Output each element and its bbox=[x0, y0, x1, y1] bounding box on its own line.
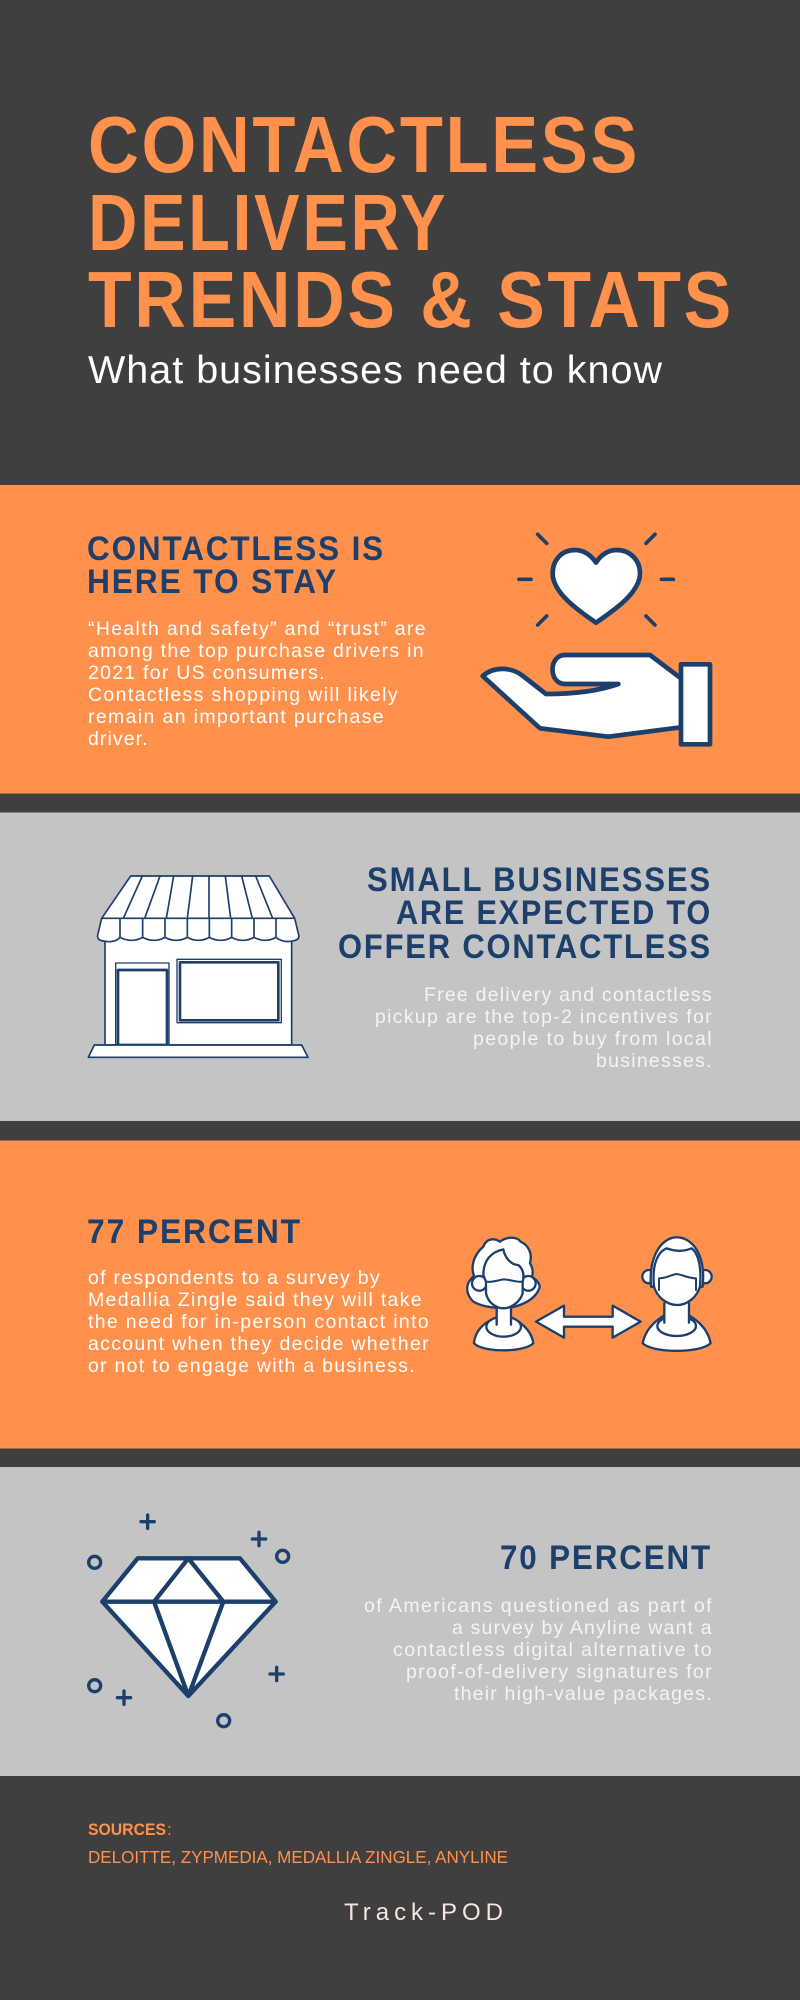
body text: of respondents to a survey by bbox=[88, 1267, 380, 1289]
body text: their high-value packages. bbox=[454, 1683, 712, 1705]
panel: 70 percent bbox=[0, 1467, 800, 1776]
subtitle: What businesses need to know bbox=[88, 349, 663, 392]
body text: people to buy from local bbox=[473, 1028, 712, 1050]
panel: contactless is here to stay bbox=[0, 485, 800, 794]
body text: among the top purchase drivers in bbox=[88, 640, 424, 662]
body text bbox=[364, 1595, 712, 1705]
heading bbox=[338, 861, 712, 966]
sources: SOURCES bbox=[88, 1820, 166, 1839]
body text: remain an important purchase bbox=[88, 706, 384, 728]
body text bbox=[88, 618, 426, 750]
body text: the need for in-person contact into bbox=[88, 1311, 429, 1333]
body text: Free delivery and contactless bbox=[424, 984, 712, 1006]
body text: businesses. bbox=[596, 1050, 712, 1072]
body text: 2021 for US consumers. bbox=[88, 662, 325, 684]
title bbox=[88, 100, 734, 344]
body text: driver. bbox=[88, 728, 148, 750]
heading: OFFER CONTACTLESS bbox=[338, 928, 712, 966]
body text: “Health and safety” and “trust” are bbox=[88, 618, 426, 640]
body text: a survey by Anyline want a bbox=[452, 1617, 712, 1639]
body text: contactless digital alternative to bbox=[393, 1639, 712, 1661]
brand name: Track-POD bbox=[344, 1899, 503, 1926]
icon: diamond with sparkles bbox=[89, 1515, 289, 1727]
body text: of Americans questioned as part of bbox=[364, 1595, 712, 1617]
body text: or not to engage with a business. bbox=[88, 1355, 415, 1377]
title: CONTACTLESS bbox=[88, 100, 640, 189]
panel: 77 percent bbox=[0, 1140, 800, 1448]
panel: small businesses bbox=[0, 812, 800, 1121]
body text: Contactless shopping will likely bbox=[88, 684, 398, 706]
title: DELIVERY bbox=[88, 178, 448, 267]
body text: proof-of-delivery signatures for bbox=[406, 1661, 712, 1683]
title: TRENDS & STATS bbox=[88, 255, 734, 344]
icon: two masked people with arrow bbox=[467, 1237, 712, 1351]
sources: : bbox=[167, 1820, 172, 1839]
heading: CONTACTLESS IS bbox=[87, 530, 385, 568]
heading: ARE EXPECTED TO bbox=[396, 894, 712, 932]
heading: SMALL BUSINESSES bbox=[367, 861, 712, 899]
sources: DELOITTE, ZYPMEDIA, MEDALLIA ZINGLE, ANYLINE bbox=[88, 1847, 508, 1867]
sources bbox=[88, 1820, 508, 1867]
body text bbox=[375, 984, 712, 1072]
icon: hand holding heart bbox=[483, 534, 710, 744]
heading: 70 PERCENT bbox=[500, 1539, 712, 1577]
icon: storefront bbox=[88, 876, 308, 1057]
heading: 77 PERCENT bbox=[87, 1213, 302, 1251]
body text: Medallia Zingle said they will take bbox=[88, 1289, 422, 1311]
body text: pickup are the top-2 incentives for bbox=[375, 1006, 712, 1028]
heading: HERE TO STAY bbox=[87, 563, 338, 601]
heading bbox=[87, 530, 385, 601]
body text: account when they decide whether bbox=[88, 1333, 429, 1355]
body text bbox=[88, 1267, 429, 1377]
